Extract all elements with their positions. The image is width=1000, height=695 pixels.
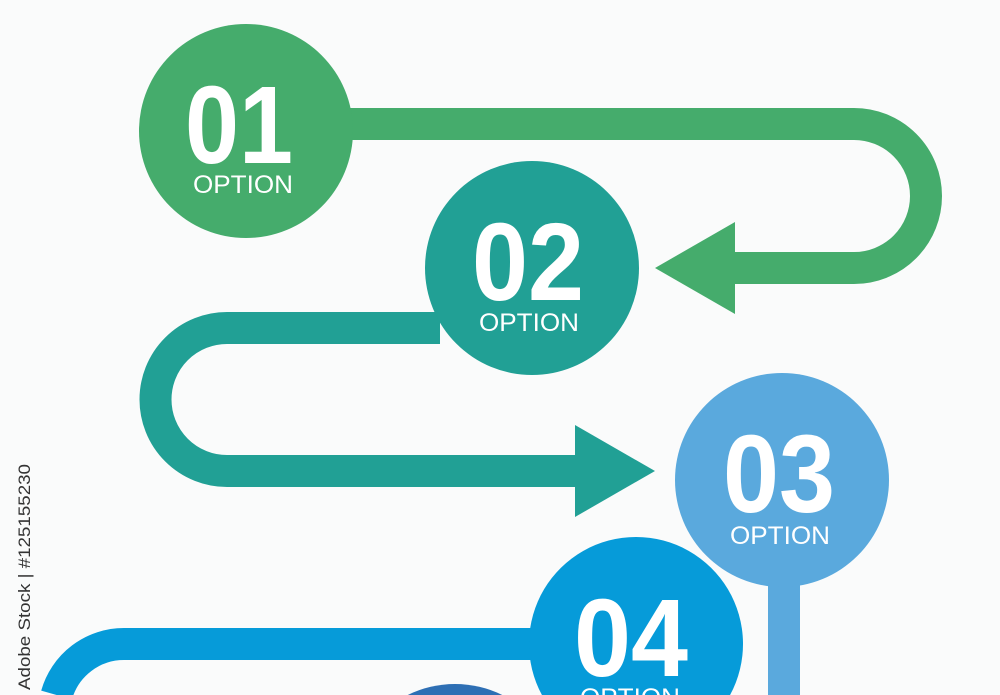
circle 02 [425,161,639,375]
circle 01: 01 [185,64,293,187]
stem under 03 [768,586,800,695]
circle 03: OPTION [730,522,830,550]
circle 03 [675,373,889,587]
path: teal connector 02 to 03 [156,328,655,517]
path: blue connector from 04 [57,644,560,695]
circle 02: OPTION [479,309,579,337]
circle 03: 03 [723,413,835,536]
path: green connector 01 to 02 [340,124,926,314]
watermark vertical text: Adobe Stock | #125155230 [15,464,34,690]
circle 01 [139,24,353,238]
circle 04 [529,537,743,695]
circle 05 partial [408,684,502,695]
circle 01: OPTION [193,171,293,199]
circle 02: 02 [472,201,584,324]
